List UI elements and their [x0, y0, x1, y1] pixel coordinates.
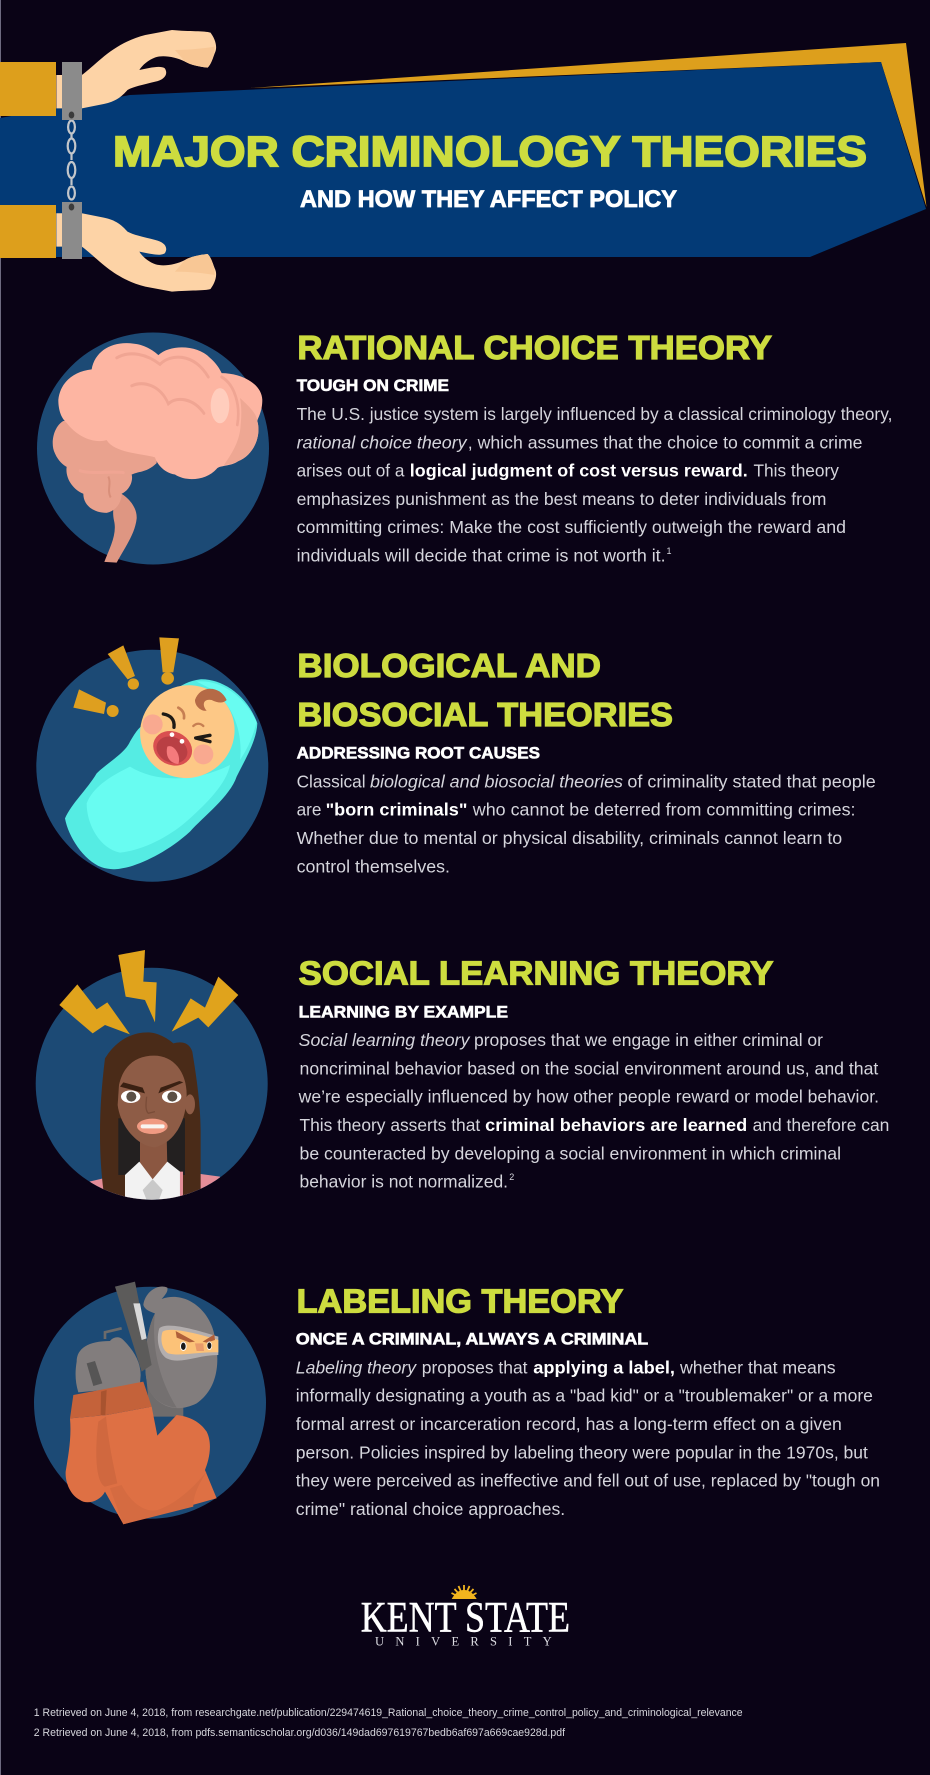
figure	[89, 1032, 220, 1205]
panel: biological and biosocial theories	[297, 647, 876, 876]
subheading: ADDRESSING ROOT CAUSES	[297, 744, 540, 762]
icon: crying baby in circle	[36, 637, 268, 882]
body text: who cannot be deterred from committing crimes:	[472, 800, 856, 820]
body text: criminal behaviors are learned	[485, 1115, 747, 1135]
body text: , which assumes that the choice to commit a crime	[468, 432, 862, 452]
body text: biological and biosocial theories	[370, 772, 623, 792]
icon: masked robber in circle	[34, 1282, 266, 1524]
body text: The U.S. justice system is largely influenced by a classical criminology theory,	[297, 404, 892, 424]
body text: informally designating a youth as a "bad kid" or a "troublemaker" or a more	[296, 1386, 873, 1406]
footnotes	[34, 1707, 743, 1739]
body text: 1	[666, 546, 672, 556]
icon: brain in circle	[37, 332, 269, 564]
footnotes: 2 Retrieved on June 4, 2018, from pdfs.semanticscholar.org/d036/149dad697619767bedb6af697a669cae928d.pdf	[34, 1727, 566, 1739]
body text: they were perceived as ineffective and fell out of use, replaced by "tough on	[296, 1471, 880, 1491]
panel: labeling theory	[296, 1282, 880, 1519]
logo: Kent State University	[361, 1585, 570, 1649]
body text: Social learning theory	[299, 1030, 471, 1050]
body text: noncriminal behavior based on the social environment around us, and that	[300, 1058, 879, 1078]
body text: proposes that we engage in either criminal or	[474, 1030, 823, 1050]
body text: be counteracted by developing a social environment in which criminal	[300, 1143, 841, 1163]
heading	[297, 647, 673, 733]
body text: 2	[509, 1172, 514, 1182]
orange jumpsuit	[66, 1382, 217, 1524]
panel: social learning theory	[298, 954, 889, 1192]
exclamation marks	[73, 637, 179, 717]
gold banner backing	[250, 43, 926, 207]
body text: individuals will decide that crime is not worth it.	[297, 546, 666, 566]
swaddle	[65, 679, 257, 869]
body text: behavior is not normalized.	[300, 1172, 508, 1192]
masked head	[143, 1287, 218, 1417]
heading: SOCIAL LEARNING THEORY	[299, 954, 773, 992]
heading: RATIONAL CHOICE THEORY	[297, 329, 772, 366]
heading: BIOSOCIAL THEORIES	[297, 696, 673, 733]
body text: "born criminals"	[326, 800, 467, 820]
body text: committing crimes: Make the cost sufficiently outweigh the reward and	[297, 517, 846, 537]
body text: are	[297, 800, 322, 820]
body text: of criminality stated that people	[627, 772, 876, 792]
body text: we’re especially influenced by how other people reward or model behavior.	[298, 1087, 879, 1107]
body text: proposes that	[422, 1357, 528, 1377]
body text: rational choice theory	[297, 432, 468, 452]
lightning bolts	[59, 950, 238, 1034]
icon: chain	[68, 120, 75, 200]
head	[123, 668, 252, 795]
body text	[297, 404, 892, 566]
icon: lower hand	[56, 213, 216, 292]
body text: arises out of a	[297, 461, 405, 481]
body text: Labeling theory	[296, 1357, 417, 1377]
subheading: TOUGH ON CRIME	[297, 377, 449, 395]
body text: control themselves.	[297, 856, 450, 876]
body text: person. Policies inspired by labeling theory were popular in the 1970s, but	[296, 1442, 868, 1462]
heading: BIOLOGICAL AND	[297, 647, 601, 684]
body text: applying a label,	[533, 1357, 675, 1377]
gun	[105, 1282, 152, 1372]
blue banner	[0, 62, 926, 257]
body text: Classical	[297, 772, 366, 792]
body text: logical judgment of cost versus reward.	[410, 461, 748, 481]
icon: gold sleeves	[0, 62, 56, 258]
body text	[297, 772, 876, 876]
body text: crime" rational choice approaches.	[296, 1499, 565, 1519]
footnotes: 1 Retrieved on June 4, 2018, from researchgate.net/publication/229474619_Rational_choice_theory_crime_control_policy_and_criminological_relevance	[34, 1707, 743, 1719]
body text: whether that means	[679, 1357, 836, 1377]
panel: rational choice theory	[297, 329, 892, 566]
icon: angry woman in circle	[36, 950, 268, 1205]
university label: UNIVERSITY	[375, 1635, 552, 1649]
subheading: ONCE A CRIMINAL, ALWAYS A CRIMINAL	[296, 1331, 648, 1349]
body text: emphasizes punishment as the best means to deter individuals from	[297, 489, 826, 509]
hand	[76, 1337, 141, 1392]
body text: Whether due to mental or physical disability, criminals cannot learn to	[297, 828, 842, 848]
banner: header with handcuffs and title	[0, 30, 926, 292]
body text: and therefore can	[753, 1115, 889, 1135]
body text: formal arrest or incarceration record, has a long-term effect on a given	[296, 1414, 842, 1434]
title: MAJOR CRIMINOLOGY THEORIES	[113, 128, 867, 176]
icon: sun	[452, 1585, 477, 1599]
subtitle: AND HOW THEY AFFECT POLICY	[300, 186, 677, 213]
wordmark: KENT STATE	[361, 1595, 570, 1642]
body text	[296, 1357, 880, 1519]
body text	[298, 1030, 889, 1192]
subheading: LEARNING BY EXAMPLE	[299, 1003, 508, 1021]
body text: This theory asserts that	[300, 1115, 480, 1135]
icon: upper hand	[56, 30, 216, 108]
icon: cuffs	[62, 62, 82, 259]
body text: This theory	[754, 461, 839, 481]
heading: LABELING THEORY	[297, 1282, 623, 1319]
